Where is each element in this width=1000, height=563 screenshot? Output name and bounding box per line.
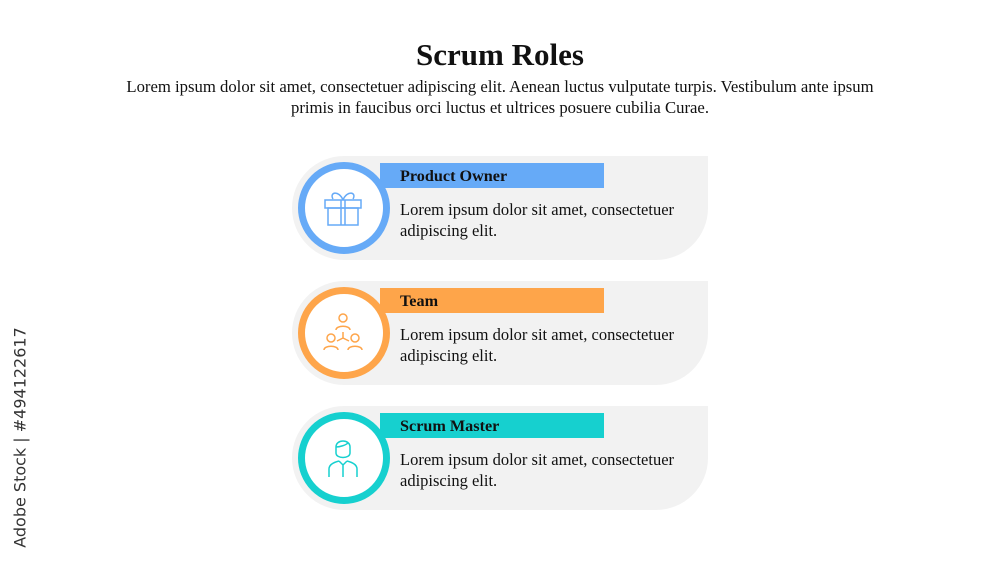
- text: product owner: Lorem ipsum dolor sit amet, consectetuer adipiscing elit.: [400, 200, 674, 240]
- title: Scrum Roles: [416, 37, 584, 72]
- icon: team: [323, 313, 363, 350]
- bar: team: [380, 288, 604, 313]
- heading: product owner: Product Owner: [400, 167, 507, 185]
- panel: scrum master: [292, 406, 708, 510]
- watermark side text: Adobe Stock | #494122617: [10, 327, 30, 548]
- ring: product owner: [298, 162, 390, 254]
- panel: product owner: [292, 156, 708, 260]
- icon: gift: [324, 192, 362, 226]
- text: scrum master: Lorem ipsum dolor sit amet, consectetuer adipiscing elit.: [400, 450, 674, 490]
- text: team: Lorem ipsum dolor sit amet, consectetuer adipiscing elit.: [400, 325, 674, 365]
- panel: team: [292, 281, 708, 385]
- bar: scrum master: [380, 413, 604, 438]
- bar: product owner: [380, 163, 604, 188]
- ring: scrum master: [298, 412, 390, 504]
- ring: team: [298, 287, 390, 379]
- subtitle: Lorem ipsum dolor sit amet, consectetuer adipiscing elit. Aenean luctus vulputate turpis. Vestibulum ante ipsum primis in faucibus orci luctus et ultrices posuere cubilia Curae.: [126, 77, 874, 117]
- heading: team: Team: [400, 292, 438, 310]
- heading: scrum master: Scrum Master: [400, 417, 499, 435]
- icon: person: [328, 440, 358, 477]
